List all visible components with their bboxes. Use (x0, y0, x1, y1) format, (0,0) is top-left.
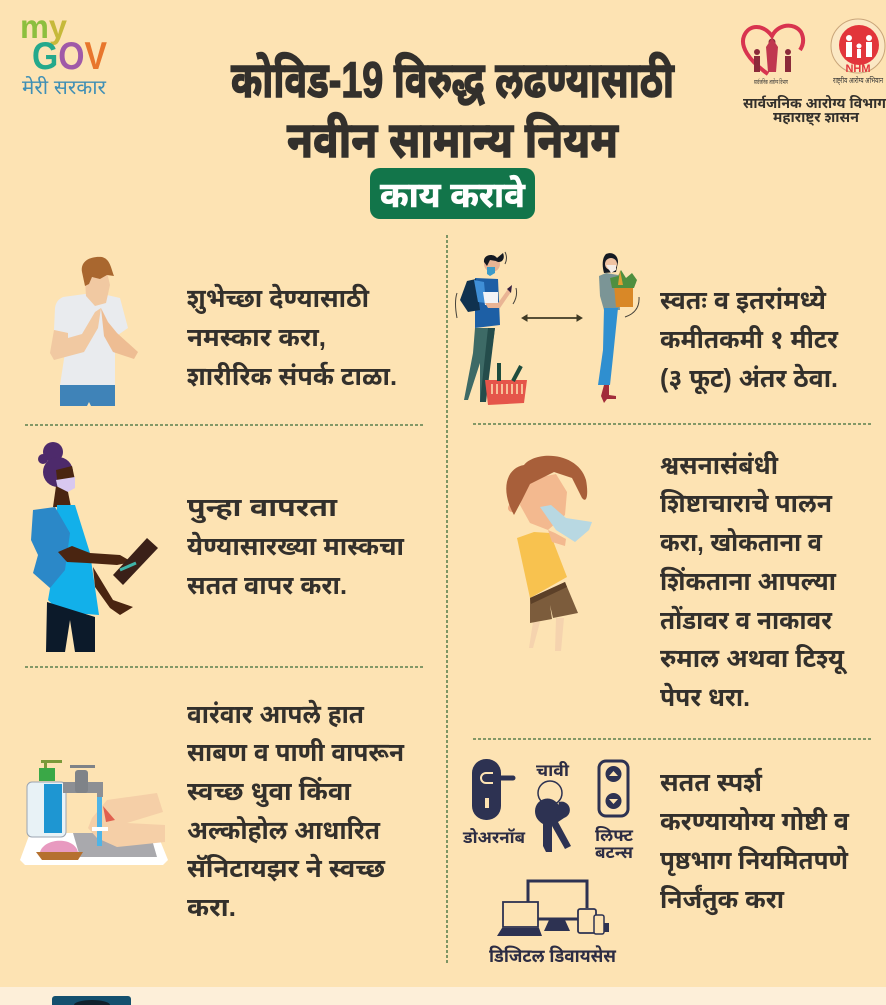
text: greeting: शुभेच्छा देण्यासाठी (187, 283, 370, 314)
text: respiratory etiquette: रुमाल अथवा टिश्यू (660, 643, 848, 675)
icon: lift buttons: बटन्स (595, 843, 633, 862)
text: disinfect surfaces: पृष्ठभाग नियमितपणे (660, 845, 849, 876)
text: respiratory etiquette: शिष्टाचाराचे पालन (660, 488, 833, 518)
text: mask: पुन्हा वापरता (187, 492, 339, 523)
text: respiratory etiquette: श्वसनासंबंधी (660, 450, 779, 480)
text: disinfect surfaces (660, 767, 850, 915)
text: respiratory etiquette: शिंकताना आपल्या (660, 566, 837, 596)
text: distance: स्वतः व इतरांमध्ये (660, 285, 826, 315)
icon: lift buttons: लिफ्ट (595, 825, 634, 845)
department name (743, 95, 886, 126)
icon: keys: चावी (536, 760, 570, 780)
text: respiratory etiquette: करा, खोकताना व (660, 527, 823, 557)
text: disinfect surfaces: सतत स्पर्श (660, 767, 763, 797)
text: hand washing: साबण व पाणी वापरून (187, 737, 405, 767)
text: hand washing: सॅनिटायझर ने स्वच्छ (187, 853, 386, 883)
icon: door knob (462, 759, 525, 847)
logo: health department: NHM (845, 63, 871, 75)
badge: what to do (370, 168, 535, 219)
title: कोविड-19 विरुद्ध लढण्यासाठी (231, 52, 675, 108)
icon: digital devices: डिजिटल डिवायसेस (489, 946, 617, 966)
text: hand washing: स्वच्छ धुवा किंवा (187, 776, 352, 807)
text: respiratory etiquette: तोंडावर व नाकावर (660, 605, 832, 635)
text: greeting: शारीरिक संपर्क टाळा. (187, 361, 397, 391)
text: distance: (३ फूट) अंतर ठेवा. (660, 363, 838, 395)
logo: health department: सार्वजनिक आरोग्य विभाग (754, 78, 788, 86)
text: distance (660, 285, 839, 395)
text: disinfect surfaces: निर्जंतुक करा (660, 884, 785, 915)
icon: sneezing boy (506, 456, 592, 651)
title: नवीन सामान्य नियम (287, 112, 619, 168)
logo: MyGov (20, 8, 107, 99)
text: mask: येण्यासारख्या मास्कचा (187, 531, 405, 561)
icon: woman with mask (31, 442, 158, 652)
logo: MyGov: मेरी सरकार (22, 75, 107, 99)
icon: door knob: डोअरनॉब (462, 827, 525, 847)
logo: MyGov: my (20, 8, 68, 45)
badge: what to do: काय करावे (380, 175, 526, 215)
logo: health department (743, 19, 885, 86)
icon: namaste man (50, 257, 138, 406)
text: respiratory etiquette: पेपर धरा. (660, 682, 750, 712)
text: respiratory etiquette (660, 450, 848, 712)
icon: lift buttons (595, 761, 634, 862)
icon: keys (535, 760, 571, 852)
text: greeting: नमस्कार करा, (187, 322, 326, 352)
department name: सार्वजनिक आरोग्य विभाग (743, 95, 886, 111)
title (231, 52, 675, 168)
text: distance: कमीतकमी १ मीटर (660, 324, 839, 354)
text: mask (187, 492, 405, 600)
text: mask: सतत वापर करा. (187, 570, 347, 600)
text: hand washing (187, 699, 405, 922)
icon: hand washing (20, 760, 168, 865)
icon: digital devices (489, 881, 617, 966)
text: greeting (187, 283, 397, 391)
department name: महाराष्ट्र शासन (773, 109, 859, 126)
text: disinfect surfaces: करण्यायोग्य गोष्टी व (660, 806, 850, 836)
icon: two people keeping distance (456, 252, 639, 405)
text: hand washing: अल्कोहोल आधारित (187, 815, 381, 845)
text: hand washing: करा. (187, 892, 236, 922)
logo: MyGov: GOV (32, 35, 107, 78)
text: hand washing: वारंवार आपले हात (187, 699, 365, 729)
